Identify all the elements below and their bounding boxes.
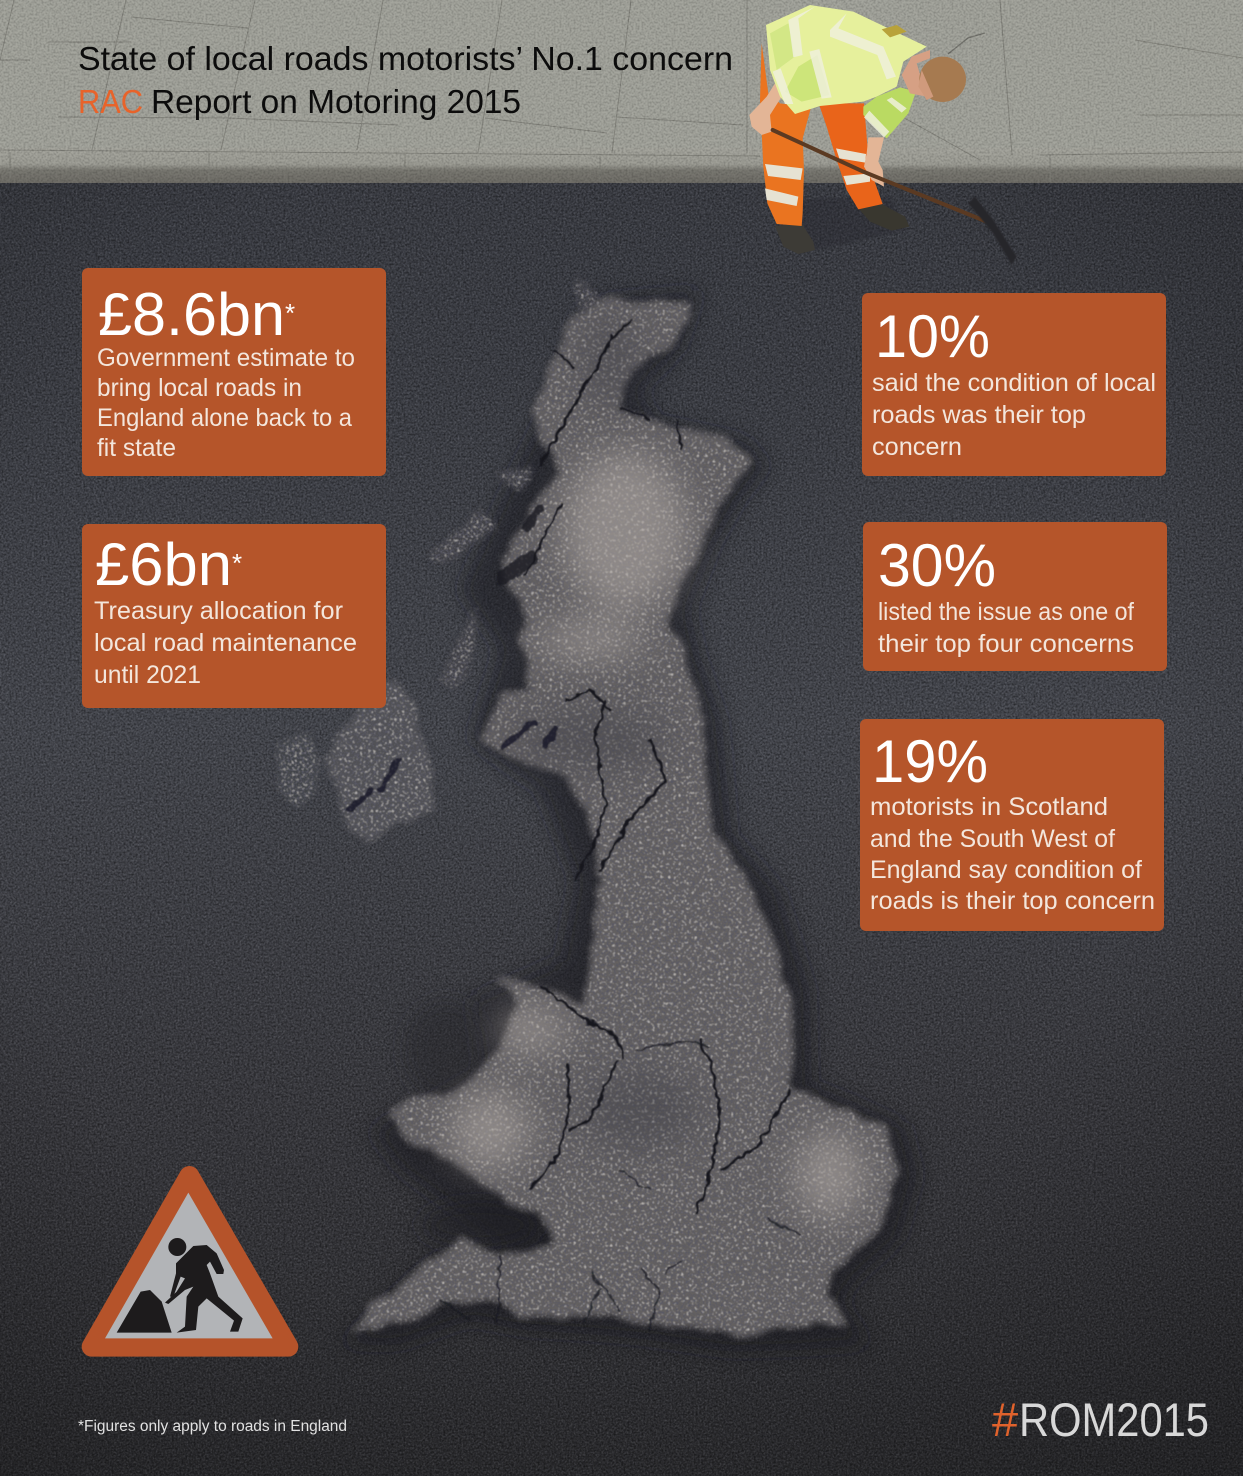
description: England alone back to a	[97, 404, 352, 432]
panel: 30%	[863, 522, 1167, 671]
map of Great Britain and Ireland worn into the asphalt	[278, 278, 918, 1352]
description	[872, 369, 1156, 461]
panel: 19%	[860, 719, 1164, 931]
left arm	[749, 83, 782, 135]
head with ginger hair	[919, 57, 966, 102]
sign face	[105, 1193, 273, 1338]
description: said the condition of local	[872, 369, 1156, 397]
Great Britain landmass	[350, 300, 897, 1336]
description: Treasury allocation for	[94, 597, 343, 625]
description: local road maintenance	[94, 629, 357, 657]
panel: 10%	[862, 293, 1166, 476]
right arm	[864, 137, 884, 187]
map shadow	[340, 290, 918, 1352]
face	[918, 70, 933, 100]
dark worn patches	[510, 315, 700, 1150]
description: fit state	[97, 434, 176, 462]
sign border	[92, 1176, 288, 1347]
stat: £8.6bn: £8.6bn	[98, 281, 285, 348]
description	[870, 793, 1155, 915]
hi-vis vest	[766, 5, 927, 138]
footnote: *Figures only apply to roads in England	[78, 1418, 347, 1435]
stat: 10%: 10%	[875, 303, 990, 370]
pavement background	[0, 0, 1243, 184]
asterisk: *	[232, 548, 242, 578]
asterisk: *	[285, 298, 295, 328]
description: concern	[872, 433, 962, 461]
hashtag	[992, 1393, 1209, 1446]
description: roads was their top	[872, 401, 1086, 429]
pile of earth	[117, 1290, 172, 1333]
title line 2: report: Report on Motoring 2015	[151, 83, 521, 120]
right boot	[858, 204, 909, 231]
Irish Sea shadow beside Wales	[405, 1000, 485, 1100]
Hebrides and outer islands	[432, 278, 598, 690]
Bristol Channel shadow	[420, 1203, 540, 1247]
rake head	[968, 197, 1017, 265]
icon: men at work road sign	[92, 1176, 288, 1347]
orange trousers	[760, 43, 883, 226]
description: bring local roads in	[97, 374, 302, 402]
description: until 2021	[94, 661, 201, 689]
dark cracks across the map	[350, 320, 800, 1330]
title line 1: State of local roads motorists’ No.1 concern	[78, 40, 733, 77]
stat: 19%: 19%	[872, 728, 988, 795]
title line 2: RAC: RAC	[78, 83, 143, 120]
title	[78, 40, 733, 120]
panel: £6bn	[82, 524, 386, 708]
stat: £6bn: £6bn	[95, 531, 232, 598]
description: and the South West of	[870, 825, 1115, 853]
panel: £8.6bn	[82, 268, 386, 476]
worker shadow	[773, 197, 907, 250]
description: roads is their top concern	[870, 887, 1155, 915]
description: listed the issue as one of	[878, 598, 1134, 626]
bright worn patches	[450, 450, 865, 1220]
description: their top four concerns	[878, 630, 1134, 658]
description: motorists in Scotland	[870, 793, 1108, 821]
neck	[902, 50, 930, 97]
ROM2015 label: ROM2015	[1019, 1393, 1209, 1446]
description: Government estimate to	[97, 344, 355, 372]
description	[94, 597, 357, 689]
rake handle	[773, 130, 987, 222]
Ireland fragments	[278, 680, 432, 838]
worker silhouette	[165, 1238, 243, 1333]
road worker raking asphalt	[749, 5, 1017, 265]
stat: 30%: 30%	[878, 532, 996, 599]
description: England say condition of	[870, 856, 1142, 884]
description	[97, 344, 355, 462]
hash symbol: #	[992, 1393, 1018, 1446]
left boot	[775, 223, 815, 254]
description	[878, 598, 1134, 658]
